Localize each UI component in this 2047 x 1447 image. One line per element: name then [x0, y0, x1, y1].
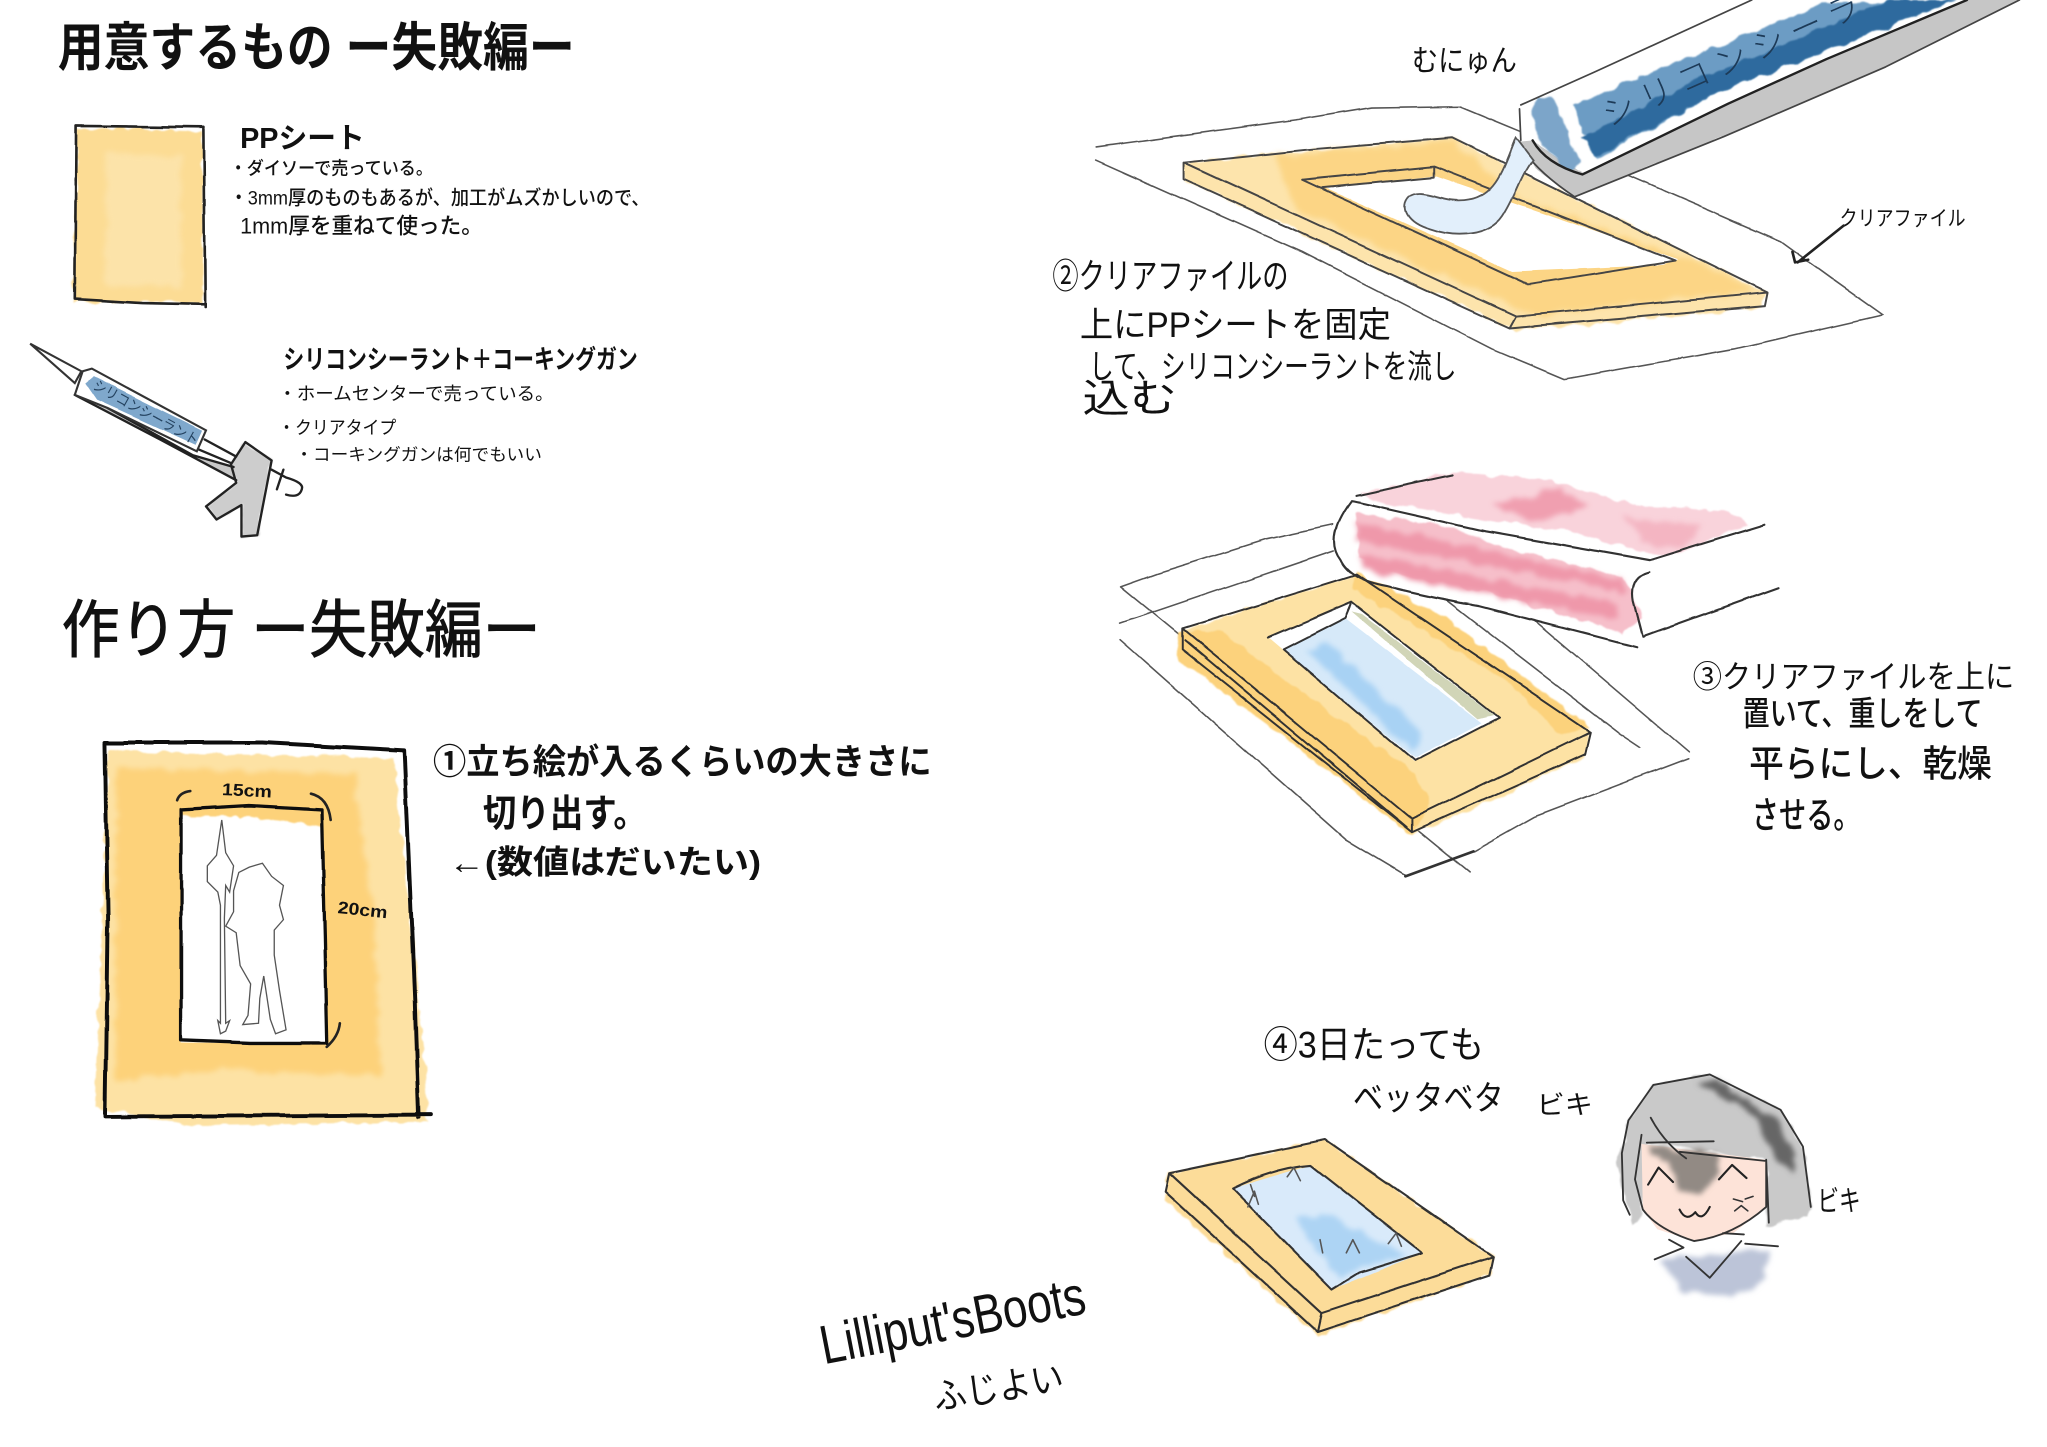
shirt: [1657, 1250, 1770, 1296]
text: step 2 instructions: 込む: [1083, 377, 1177, 421]
text: sealant notes: [278, 383, 554, 464]
panel: step 4 still sticky after three days: [1165, 1024, 1861, 1335]
hair: [1617, 1074, 1812, 1227]
text: step 3 instructions: させる。: [1752, 795, 1861, 836]
text: step 4 caption: ベッタベタ: [1353, 1080, 1504, 1118]
icon: PP sheet: [73, 126, 205, 307]
icon: caulking gun: シリコンシーラント: [90, 378, 201, 449]
diagram: PP frame with cured silicone: [1176, 572, 1590, 836]
label: anger sound right: ビキ: [1817, 1186, 1861, 1218]
panel: step 3 weight and dry: [1121, 472, 2014, 876]
text: step 2 instructions: [1052, 257, 1457, 421]
text: sealant notes: ・コーキングガンは何でもいい: [295, 445, 542, 464]
text: step 1 instructions: ←(数値はだいたい): [449, 844, 761, 881]
heading: silicone sealant plus caulking gun: シリコンシーラント＋コーキングガン: [283, 345, 638, 375]
heading: PP sheet: PPシート: [240, 123, 365, 155]
label: squish sound: むにゅん: [1412, 45, 1517, 78]
diagram: sticky frame: [1165, 1140, 1493, 1335]
diagram: clear file sheets: [1121, 525, 1689, 876]
signature: Lilliput'sBoots: [815, 1264, 1090, 1376]
icon: caulking gun: [30, 344, 302, 537]
bangs shadow: [1648, 1145, 1719, 1194]
text: PP sheet notes: ・3mm厚のものもあるが、加工がムズかしいので、: [230, 187, 650, 210]
signature: [815, 1264, 1090, 1418]
hair shadow: [1697, 1080, 1796, 1173]
face lines: [1622, 1074, 1811, 1241]
text: step 2 instructions: ②クリアファイルの: [1052, 257, 1289, 297]
text: step 3 instructions: 平らにし、乾燥: [1749, 744, 1992, 785]
text: step 4 caption: ④3日たっても: [1264, 1024, 1484, 1065]
panel: step 1 cut out the frame: [94, 742, 932, 1126]
text: step 3 instructions: [1693, 659, 2014, 836]
text: step 1 instructions: 切り出す。: [483, 793, 647, 835]
label: anger sound left: ビキ: [1537, 1090, 1593, 1120]
title: how to make, failure edition: 作り方 ー失敗編ー: [62, 596, 541, 666]
text: step 4 caption: [1264, 1024, 1504, 1118]
text: step 1 instructions: ①立ち絵が入るくらいの大きさに: [433, 742, 932, 782]
text: step 2 instructions: 上にPPシートを固定: [1080, 305, 1391, 345]
label: width 15cm: 15cm: [222, 780, 272, 802]
panel: PP sheet material: [73, 123, 650, 307]
icon: silicone tube: [1520, 0, 2019, 197]
character: annoyed face: [1617, 1074, 1812, 1296]
text: PP sheet notes: [230, 157, 650, 239]
figure: knight silhouette with spear: [207, 820, 286, 1034]
signature: ふじよい: [930, 1357, 1066, 1418]
panel: step 2 pour silicone: [1052, 0, 2019, 421]
panel: silicone sealant and caulking gun: [30, 344, 638, 537]
title: materials, failure edition: 用意するもの ー失敗編ー: [58, 19, 575, 78]
text: step 3 instructions: 置いて、重しをして: [1743, 695, 1983, 733]
text: sealant notes: ・クリアタイプ: [278, 417, 397, 438]
arrow: to clear file: [1792, 226, 1844, 262]
icon: silicone bead: [1405, 138, 1533, 235]
text: PP sheet notes: ・ダイソーで売っている。: [230, 157, 433, 178]
label: height 20cm: 20cm: [337, 898, 388, 922]
icon: weight book: [1332, 472, 1782, 647]
label: clear file: クリアファイル: [1840, 208, 1966, 231]
diagram: PP frame on clear file: [1184, 138, 1768, 331]
text: step 1 instructions: [433, 742, 932, 881]
face skin: [1642, 1144, 1766, 1241]
text: step 3 instructions: ③クリアファイルを上に: [1693, 659, 2014, 694]
diagram: PP sheet frame with window: [94, 743, 430, 1126]
text: sealant notes: ・ホームセンターで売っている。: [278, 383, 554, 404]
diagram: clear file sheet: [1096, 106, 1883, 379]
text: step 2 instructions: して、シリコンシーラントを流し: [1089, 348, 1457, 385]
text: PP sheet notes: 1mm厚を重ねて使った。: [240, 214, 483, 239]
